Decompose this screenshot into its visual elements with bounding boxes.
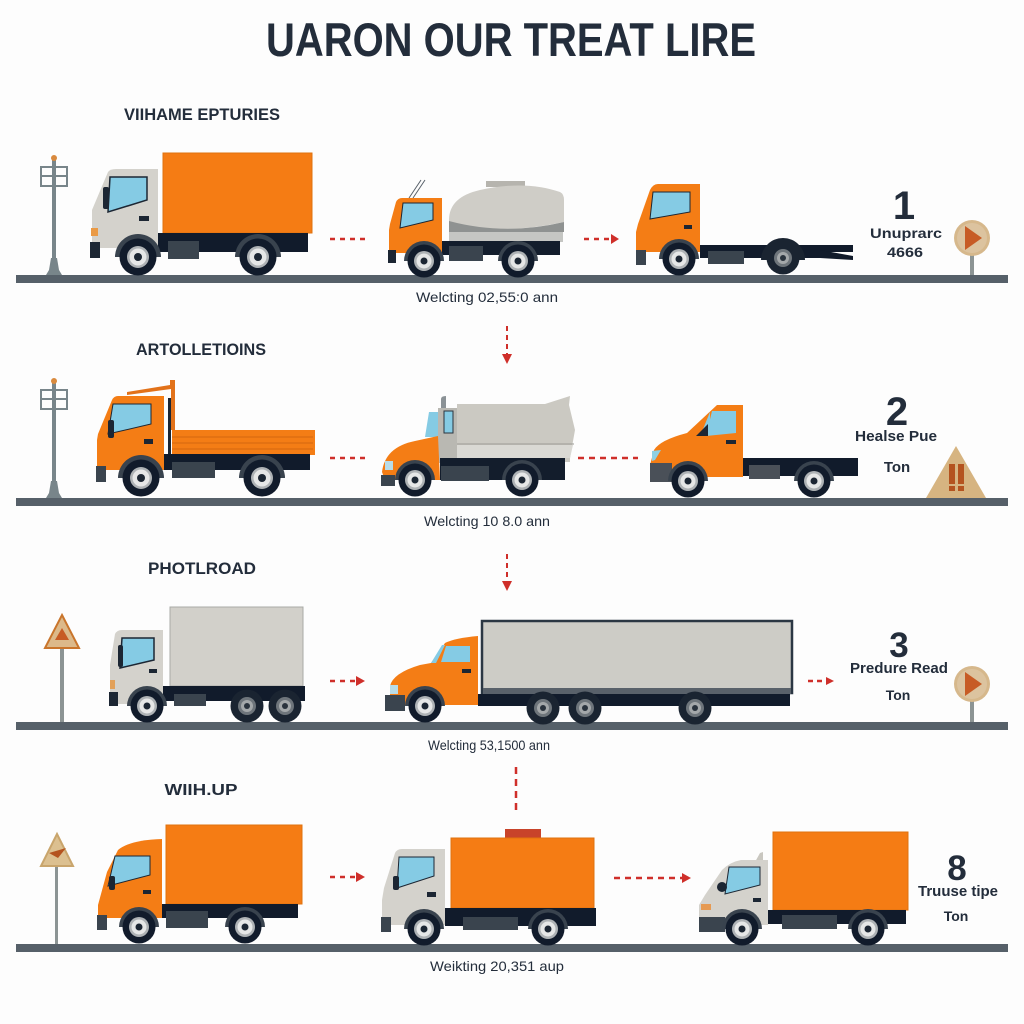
panel: row 4 <box>16 782 1008 974</box>
callout: number 2 <box>855 390 937 476</box>
callout: number 1: 4666 <box>887 244 923 260</box>
truck: orange bonneted tanker <box>381 396 575 496</box>
callout: number 1 <box>870 184 942 260</box>
road: row 2 <box>16 498 1008 506</box>
arrow <box>330 676 365 686</box>
arrow <box>578 457 638 459</box>
truck: semi trailer <box>385 621 792 724</box>
callout: number 1: 1 <box>893 184 915 228</box>
road: row 1 <box>16 275 1008 283</box>
panel: row 2 <box>16 340 1008 529</box>
callout: number 2: Healse Pue <box>855 428 937 445</box>
truck: orange box with grey cab <box>90 153 312 276</box>
callout: number 3: Predure Read <box>850 660 948 677</box>
arrow <box>330 872 365 882</box>
arrow <box>330 457 366 459</box>
callout: number 2: 2 <box>886 390 908 434</box>
truck: grey box <box>109 607 305 722</box>
arrow: row 1 to row 2 <box>502 326 512 364</box>
heading: row 2: ARTOLLETIOINS <box>136 340 266 359</box>
truck: orange flatbed <box>636 184 853 276</box>
truck: tanker <box>388 180 564 278</box>
truck: orange dropside <box>96 380 315 496</box>
icon: warning sign on pole <box>41 834 73 944</box>
truck: orange box with small grey cab <box>699 832 908 946</box>
callout: number 8 <box>918 849 998 924</box>
icon: warning triangle <box>926 446 986 498</box>
callout: number 3: Ton <box>886 687 910 703</box>
callout: number 3: 3 <box>889 626 909 665</box>
arrow <box>614 873 691 883</box>
arrow <box>808 677 834 685</box>
arrow <box>330 238 366 240</box>
truck: orange box with orange cab <box>97 825 302 944</box>
callout: number 8: Ton <box>944 908 968 924</box>
truck: orange van flatbed <box>650 405 858 498</box>
panel: row 1 <box>16 105 1008 305</box>
arrow: row 2 to row 3 <box>502 554 512 591</box>
callout: number 2: Ton <box>884 459 910 476</box>
heading: row 3: PHOTLROAD <box>148 559 256 578</box>
callout: number 8: Truuse tipe <box>918 883 998 900</box>
weight label: Welcting 53,1500 ann <box>428 737 550 753</box>
callout: number 1: Unuprarc <box>870 225 942 241</box>
icon: street lamp <box>40 155 68 275</box>
panel: row 3 <box>16 559 1008 753</box>
weight label: Weikting 20,351 aup <box>430 958 564 974</box>
weight label: Welcting 02,55:0 ann <box>416 289 558 305</box>
callout: number 8: 8 <box>947 849 967 888</box>
arrow: row 3 to row 4 <box>515 767 517 815</box>
road: row 3 <box>16 722 1008 730</box>
callout: number 3 <box>850 626 948 703</box>
icon: warning sign on pole <box>45 615 79 722</box>
icon: play sign <box>954 666 990 722</box>
truck: orange box with grey cab and roof unit <box>381 829 596 946</box>
icon: street lamp <box>40 378 68 498</box>
heading: row 1: VIIHAME EPTURIES <box>124 105 280 124</box>
icon: play sign <box>954 220 990 275</box>
road: row 4 <box>16 944 1008 952</box>
arrow <box>584 234 619 244</box>
heading: row 4: WIIH.UP <box>164 782 238 799</box>
weight label: Welcting 10 8.0 ann <box>424 513 550 529</box>
title: UARON OUR TREAT LIRE <box>266 13 756 66</box>
